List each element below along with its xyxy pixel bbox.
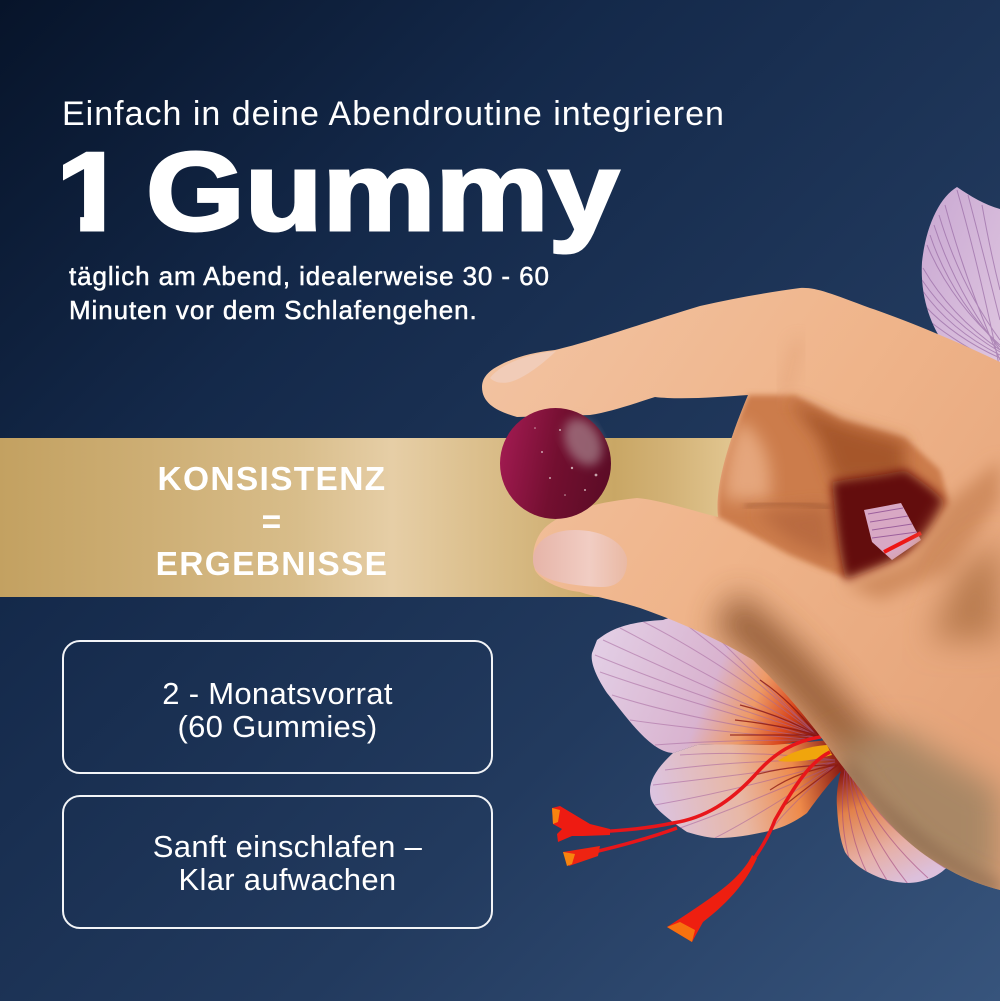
box: sleep claim xyxy=(62,795,493,929)
fingernail: thumb xyxy=(533,530,627,587)
box: supply: 2 - Monatsvorrat xyxy=(162,676,393,711)
hand: thumb web shade xyxy=(845,460,1000,600)
flower: lower middle petal xyxy=(650,740,850,838)
dosage text: täglich am Abend, idealerweise 30 - 60 xyxy=(69,261,550,291)
banner text xyxy=(156,461,388,583)
illustration xyxy=(482,187,1000,942)
hand xyxy=(482,288,1000,895)
flower: yellow anther xyxy=(778,745,832,762)
main title: 1 xyxy=(56,130,127,254)
fingernail: index xyxy=(490,351,556,383)
banner text: = xyxy=(262,504,282,540)
box: sleep claim: Sanft einschlafen – xyxy=(153,829,422,864)
dosage text: Minuten vor dem Schlafengehen. xyxy=(69,295,478,325)
flower: top right petal xyxy=(922,187,1000,380)
box: sleep claim: Klar aufwachen xyxy=(179,862,396,897)
box: supply xyxy=(62,640,493,774)
hand: knuckle crease xyxy=(782,340,800,398)
gummy xyxy=(500,408,611,519)
hand: curled finger xyxy=(717,395,950,578)
flower: lower right petal xyxy=(837,767,947,884)
flower: red stigmas xyxy=(552,737,830,942)
gold banner xyxy=(0,438,740,597)
flower: lower left petal xyxy=(592,618,830,753)
hand: lower palm edge xyxy=(830,730,1000,895)
main title: Gummy xyxy=(146,130,619,254)
dosage text xyxy=(69,261,550,325)
intro heading: Einfach in deine Abendroutine integrieren xyxy=(62,95,725,133)
hand: inner hollow xyxy=(832,470,945,580)
box: supply: (60 Gummies) xyxy=(178,709,377,744)
banner text: ERGEBNISSE xyxy=(156,546,388,583)
banner text: KONSISTENZ xyxy=(158,461,386,498)
hand: petal seen through gap xyxy=(864,503,921,560)
hand: diagonal palm shadow xyxy=(725,610,880,770)
